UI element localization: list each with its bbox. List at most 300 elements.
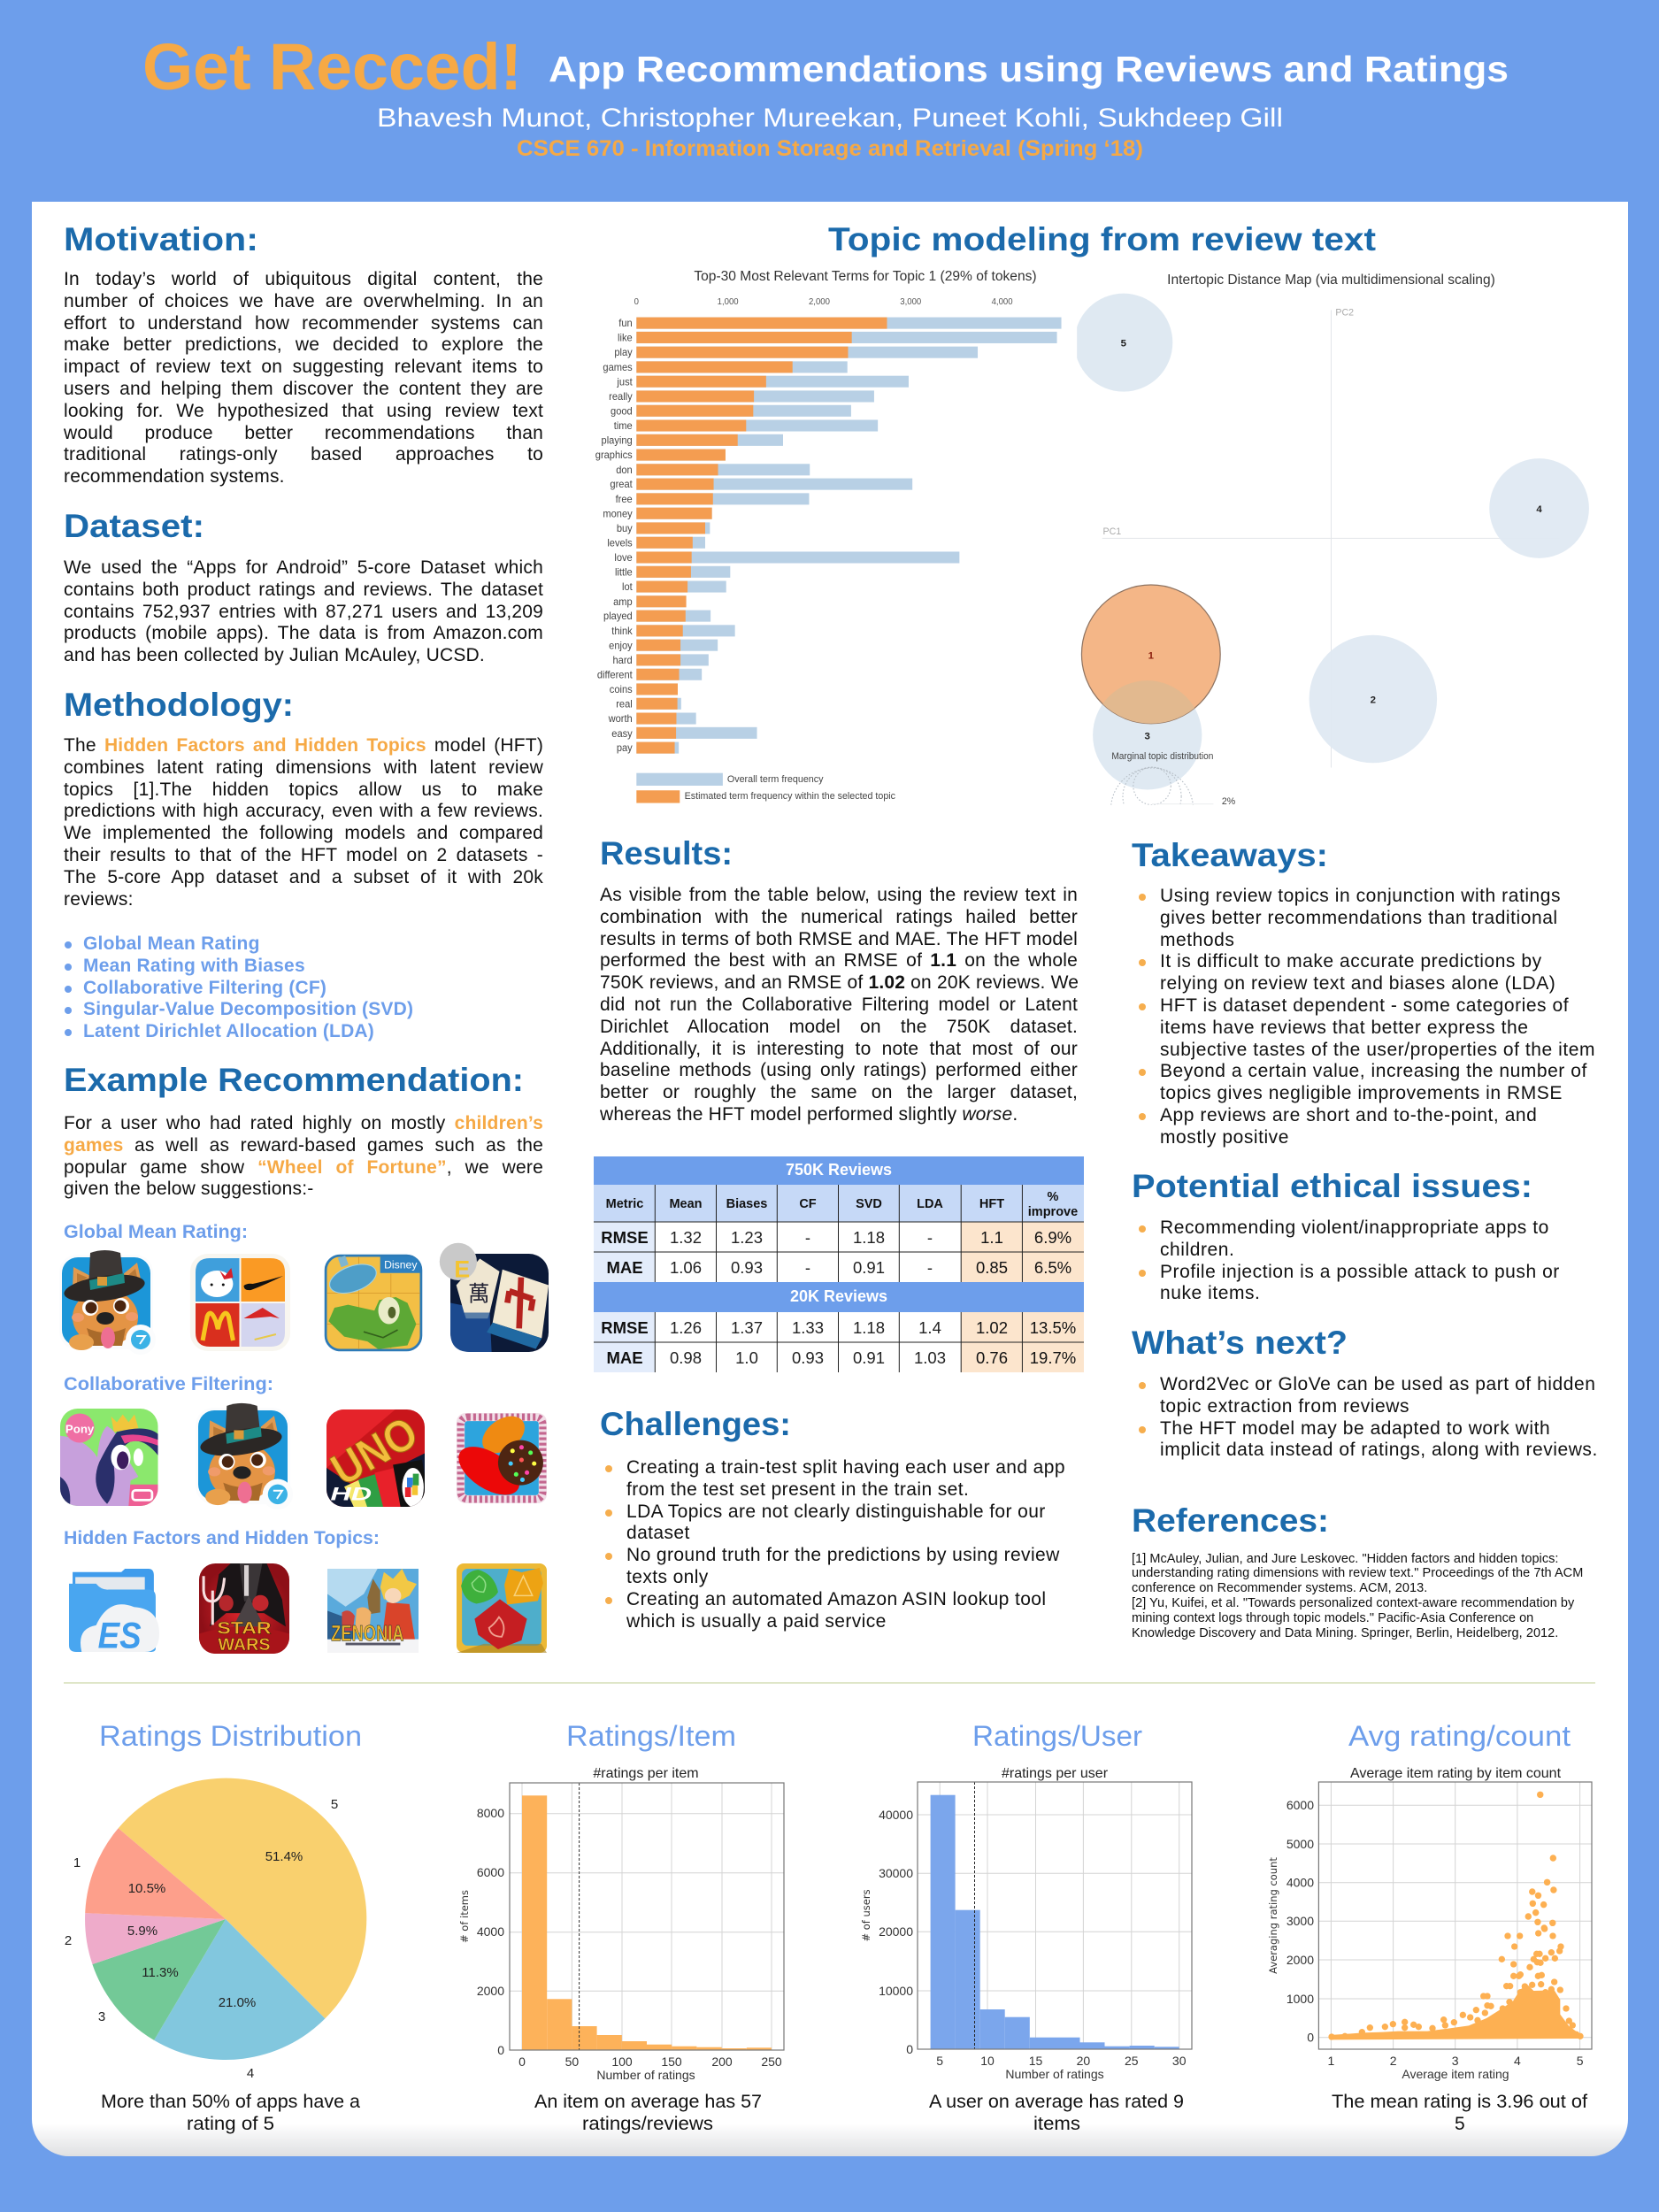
text: results: performed the best with an RMSE of 1.1 on the whole xyxy=(600,950,1078,971)
table text: LDA xyxy=(917,1197,943,1211)
tick labels: 50 xyxy=(565,2055,579,2069)
term labels: easy xyxy=(611,729,633,740)
tick labels: 25 xyxy=(1125,2054,1139,2068)
heading: Motivation: Motivation: xyxy=(64,221,258,257)
pie labels: 4 xyxy=(247,2066,254,2081)
course line: CSCE 670 - Information Storage and Retrieval (Spring ‘18) xyxy=(517,136,1143,161)
term labels: different xyxy=(597,670,634,680)
text: results: better or roughly the same on the larger dataset, xyxy=(600,1082,1078,1102)
map title: Intertopic Distance Map (via multidimensional scaling) xyxy=(1167,273,1495,288)
results table xyxy=(594,1156,1084,1372)
tick labels xyxy=(1286,1798,1584,2068)
table text: 0.85 xyxy=(976,1258,1008,1277)
term labels: enjoy xyxy=(609,641,633,651)
tick labels: 0 xyxy=(497,2043,504,2057)
upper outlier points xyxy=(1525,1792,1557,1932)
caption: ratings per user: A user on average has rated 9 xyxy=(929,2092,1184,2112)
icon: puppy app xyxy=(59,1250,156,1355)
pie labels: 10.5% xyxy=(128,1881,165,1896)
histogram: ratings per item xyxy=(458,1766,784,2082)
list: ethical issues: nuke items. xyxy=(1160,1283,1260,1303)
icon: puppy app repeat xyxy=(196,1403,293,1509)
topic circle 5 xyxy=(1074,294,1172,392)
tick labels: 3000 xyxy=(1286,1914,1314,1928)
term labels: just xyxy=(616,377,633,388)
tick labels: 0 xyxy=(1307,2030,1314,2044)
heading: Ratings/User: Ratings/User xyxy=(972,1720,1142,1752)
table text: RMSE xyxy=(601,1228,649,1247)
term labels: worth xyxy=(608,714,633,725)
x axis label: Number of ratings xyxy=(1005,2067,1104,2081)
term labels: played xyxy=(603,611,633,622)
axis tick labels: 1,000 xyxy=(718,297,739,307)
tick labels: 30 xyxy=(1172,2054,1187,2068)
chart title: #ratings per user xyxy=(1002,1766,1109,1781)
text: dataset: products (mobile apps). The data is from Amazon.com xyxy=(64,623,543,643)
marginal topic distribution legend: Marginal topic distribution xyxy=(1111,751,1214,762)
term labels: games xyxy=(603,363,633,373)
term labels: love xyxy=(614,553,633,564)
text: references xyxy=(1132,1552,1583,1640)
text: motivation: In today’s world of ubiquitous digital content, the xyxy=(64,269,543,289)
slice 5 xyxy=(119,1778,366,2018)
icon: ES file explorer: ES xyxy=(98,1616,142,1656)
table text: 6.5% xyxy=(1034,1258,1071,1277)
text: dataset: contains both product ratings and reviews. The dataset xyxy=(64,580,543,600)
tick labels: 15 xyxy=(1029,2054,1042,2068)
text: dataset: contains 752,937 entries with 87,271 users and 13,209 xyxy=(64,602,543,622)
text: motivation: looking for. We hypothesized that using review text xyxy=(64,401,543,421)
table text: 1.26 xyxy=(670,1318,702,1337)
term labels: really xyxy=(609,392,633,403)
term labels: levels xyxy=(607,538,633,549)
list: takeaways: gives better recommendations than traditional xyxy=(1160,908,1558,928)
term labels: real xyxy=(616,699,633,710)
list: challenges: from the test set present in the train set. xyxy=(626,1479,969,1500)
icon: Angry Birds Star Wars: WARS xyxy=(218,1635,271,1655)
caption: ratings per item xyxy=(534,2092,762,2134)
table text: HFT xyxy=(979,1197,1004,1211)
axes xyxy=(1102,310,1559,768)
topic circle 5: 5 xyxy=(1121,339,1127,349)
pie labels: 11.3% xyxy=(142,1965,179,1980)
text: results: baseline methods (using only ratings) performed either xyxy=(600,1060,1078,1080)
axis tick labels: 3,000 xyxy=(900,297,922,307)
bar chart: top terms for topic 1 xyxy=(595,269,1062,803)
tick labels: 6000 xyxy=(477,1865,504,1879)
term labels: lot xyxy=(622,582,633,593)
text: methodology: topics [1].The hidden topics allow us to make xyxy=(64,780,543,800)
list: takeaways: topics gives negligible improvements in RMSE xyxy=(1160,1083,1563,1103)
list: takeaways: relying on review text and biases alone (LDA) xyxy=(1160,973,1555,994)
axis labels: PC1 xyxy=(1103,526,1121,537)
grid xyxy=(1318,1782,1592,2049)
table text: 1.23 xyxy=(731,1228,763,1247)
text: references: mining context logs through topic models." Pacific-Asia Conference on xyxy=(1132,1611,1533,1625)
topic frequency bars xyxy=(636,318,887,754)
axis tick labels: 4,000 xyxy=(992,297,1013,307)
list: baseline models: Singular-Value Decomposition (SVD) xyxy=(83,999,413,1019)
legend xyxy=(636,773,896,803)
table text: 1.32 xyxy=(670,1228,702,1247)
icon: My Little Pony: Pony xyxy=(65,1423,95,1435)
heading: Takeaways: Takeaways: xyxy=(1132,837,1328,873)
caption: mean rating: 5 xyxy=(1455,2114,1465,2134)
table text: 1.06 xyxy=(670,1258,702,1277)
list: challenges: which is usually a paid service xyxy=(626,1611,887,1632)
heading: Dataset: Dataset: xyxy=(64,508,204,544)
authors: Bhavesh Munot, Christopher Mureekan, Puneet Kohli, Sukhdeep Gill xyxy=(377,104,1283,133)
caption: mean rating: The mean rating is 3.96 out of xyxy=(1332,2092,1587,2112)
tick labels: 1 xyxy=(1328,2054,1335,2068)
text: references: [1] McAuley, Julian, and Jure Leskovec. "Hidden factors and hidden topics: xyxy=(1132,1552,1559,1566)
heading: Avg rating/count: Avg rating/count xyxy=(1348,1720,1571,1752)
x axis label: Number of ratings xyxy=(596,2068,695,2082)
icon: mahjong xyxy=(440,1243,549,1352)
table text: 1.02 xyxy=(976,1318,1008,1337)
text: references: Knowledge Discovery and Data Mining. Springer, Berlin, Heidelberg, 2012. xyxy=(1132,1626,1558,1640)
table text: Mean xyxy=(669,1197,703,1211)
list: takeaways: It is difficult to make accurate predictions by xyxy=(1160,951,1542,972)
topic circle 2: 2 xyxy=(1371,695,1376,705)
table text: 0.93 xyxy=(731,1258,763,1277)
tick labels: 5 xyxy=(1577,2054,1584,2068)
intertopic distance map xyxy=(1074,273,1589,850)
tick labels: 150 xyxy=(661,2055,682,2069)
tick labels: 10 xyxy=(980,2054,995,2068)
text: methodology: combines latent rating dimensions with latent review xyxy=(64,757,543,778)
table text: 1.1 xyxy=(980,1228,1003,1247)
scatter: average rating by count xyxy=(1267,1766,1592,2081)
text: results: 750K reviews, and an RMSE of 1.02 on 20K reviews. We xyxy=(600,972,1079,993)
table text: 1.37 xyxy=(731,1318,763,1337)
list: what's next xyxy=(1139,1374,1598,1460)
heading: Ratings/Item: Ratings/Item xyxy=(566,1720,736,1752)
term labels: like xyxy=(618,333,633,344)
label: Collaborative Filtering: Collaborative Filtering: xyxy=(64,1374,273,1394)
text: motivation xyxy=(64,269,543,487)
text: motivation: effort to understand how recommender systems can xyxy=(64,313,543,334)
heading: Ratings Distribution: Ratings Distribution xyxy=(99,1720,362,1752)
list: takeaways: subjective tastes of the user/properties of the item xyxy=(1160,1040,1595,1060)
heading: Challenges: Challenges: xyxy=(600,1406,791,1442)
text: results: Dirichlet Allocation model on the 750K dataset. xyxy=(600,1017,1078,1037)
table text: CF xyxy=(799,1197,817,1211)
list: takeaways xyxy=(1139,886,1595,1148)
list: baseline models: Mean Rating with Biases xyxy=(83,956,305,976)
term labels: little xyxy=(615,567,633,579)
icon: Zenonia: ZENONIA xyxy=(331,1623,404,1646)
table text: 0.93 xyxy=(792,1348,824,1367)
legend: Overall term frequency xyxy=(727,774,824,785)
caption: ratings per item: An item on average has 57 xyxy=(534,2092,762,2112)
text: dataset: and has been collected by Julian McAuley, UCSD. xyxy=(64,645,485,665)
heading: Potential ethical issues: Potential ethical issues: xyxy=(1132,1168,1532,1204)
chart title: #ratings per item xyxy=(593,1766,699,1781)
y axis label: # of users xyxy=(860,1889,872,1942)
tick labels: 100 xyxy=(611,2055,633,2069)
pie labels: 5 xyxy=(331,1797,338,1812)
table text: RMSE xyxy=(601,1318,649,1337)
slice 2 xyxy=(85,1913,226,1964)
heading: Methodology: Methodology: xyxy=(64,687,294,723)
icon: UNO: HD xyxy=(330,1484,372,1504)
list: challenges: texts only xyxy=(626,1567,709,1587)
tick labels: 8000 xyxy=(477,1806,504,1820)
bars xyxy=(522,1795,772,2050)
text: results: results in terms of both RMSE and MAE. The HFT model xyxy=(600,929,1078,949)
table text: Biases xyxy=(726,1197,767,1211)
tick labels: 30000 xyxy=(879,1866,913,1880)
text: methodology: We implemented the following models and compared xyxy=(64,823,543,843)
text: references: [2] Yu, Kuifei, et al. "Towards personalized context-aware recommendation by xyxy=(1132,1596,1574,1610)
term labels: coins xyxy=(610,685,633,695)
list: baseline models xyxy=(65,933,413,1041)
text: example recommendation: For a user who had rated highly on mostly children’s xyxy=(64,1113,543,1133)
table text: 13.5% xyxy=(1030,1318,1076,1337)
list: what's next: Word2Vec or GloVe can be used as part of hidden xyxy=(1160,1374,1595,1394)
grid xyxy=(918,1782,1192,2049)
table text: 750K Reviews xyxy=(786,1161,892,1179)
tick labels: 6000 xyxy=(1286,1798,1314,1812)
icon: logo quiz xyxy=(190,1254,290,1351)
text: example recommendation: given the below suggestions:- xyxy=(64,1179,313,1199)
tick labels xyxy=(879,1808,1187,2068)
list: takeaways: App reviews are short and to-the-point, and xyxy=(1160,1105,1537,1125)
list: challenges: No ground truth for the predictions by using review xyxy=(626,1545,1060,1565)
bars xyxy=(931,1795,1179,2049)
table text: 1.03 xyxy=(914,1348,946,1367)
table text: - xyxy=(927,1258,933,1277)
list: takeaways: Using review topics in conjunction with ratings xyxy=(1160,886,1561,906)
term labels: graphics xyxy=(595,450,633,461)
term labels: buy xyxy=(617,524,633,534)
slice 3 xyxy=(92,1919,226,2040)
text: motivation: make better predictions, we decided to explore the xyxy=(64,334,543,355)
term labels: playing xyxy=(602,435,633,447)
dense point mass xyxy=(1328,1925,1584,2040)
text: motivation: recommendation systems. xyxy=(64,466,285,487)
text: motivation: users and helping them discover the content they are xyxy=(64,379,543,399)
y axis label: Averaging rating count xyxy=(1267,1857,1279,1974)
axis labels: PC2 xyxy=(1335,308,1354,319)
table text: 19.7% xyxy=(1030,1348,1076,1367)
table lines xyxy=(594,1185,1084,1372)
table text xyxy=(601,1161,1078,1367)
pie chart: ratings distribution xyxy=(65,1778,366,2081)
table text: - xyxy=(927,1228,933,1247)
term labels: money xyxy=(603,509,633,519)
text: methodology: The 5-core App dataset and a subset of it with 20k xyxy=(64,867,543,887)
text: results: combination with the numerical ratings hailed better xyxy=(600,907,1078,927)
term labels: don xyxy=(616,465,633,476)
caption: ratings per user xyxy=(929,2092,1184,2134)
chart title: Average item rating by item count xyxy=(1350,1766,1562,1781)
list: challenges xyxy=(605,1457,1065,1632)
tick labels: 1000 xyxy=(1286,1992,1314,2006)
text: motivation: impact of review text on suggesting relevant items to xyxy=(64,357,543,377)
caption: ratings per user: items xyxy=(1033,2114,1080,2134)
x axis label: Average item rating xyxy=(1402,2067,1509,2081)
tick labels: 4000 xyxy=(477,1924,504,1939)
text: methodology: reviews: xyxy=(64,889,134,910)
tick labels: 5000 xyxy=(1286,1837,1314,1851)
topic circle 3 xyxy=(1093,680,1202,789)
text: references: conference on Recommender systems. ACM, 2013. xyxy=(1132,1581,1427,1595)
list: takeaways: Beyond a certain value, increasing the number of xyxy=(1160,1061,1587,1081)
term labels: fun xyxy=(618,319,633,329)
term labels: good xyxy=(611,406,633,417)
icon: mahjong: E xyxy=(454,1256,470,1283)
tick labels: 20000 xyxy=(879,1924,913,1939)
topic circle 1 selected xyxy=(1081,585,1220,789)
list: baseline models: Collaborative Filtering (CF) xyxy=(83,978,326,998)
text: methodology: their results to that of the HFT model on 2 datasets - xyxy=(64,845,543,865)
heading: Topic modeling: Topic modeling from review text xyxy=(828,221,1376,257)
slice 1 xyxy=(85,1828,226,1919)
heading: Results: Results: xyxy=(600,835,733,872)
list: what's next: implicit data instead of ratings, along with reviews. xyxy=(1160,1440,1598,1460)
text: dataset: We used the “Apps for Android” 5-core Dataset which xyxy=(64,557,543,578)
table text: 1.4 xyxy=(918,1318,941,1337)
tick labels: 10000 xyxy=(879,1984,913,1998)
list: ethical issues xyxy=(1139,1217,1560,1303)
list: takeaways: HFT is dataset dependent - some categories of xyxy=(1160,995,1569,1016)
chart title: Top-30 Most Relevant Terms for Topic 1 (29% of tokens) xyxy=(694,269,1037,284)
term labels: hard xyxy=(613,656,633,666)
table text: 1.33 xyxy=(792,1318,824,1337)
text: results: did not run the Collaborative Filtering model or Latent xyxy=(600,995,1078,1015)
text: results: Additionally, it is interesting to note that most of our xyxy=(600,1039,1078,1059)
topic circle 2 xyxy=(1310,635,1437,763)
text: dataset xyxy=(64,557,543,665)
table text: 20K Reviews xyxy=(790,1287,887,1305)
term labels: time xyxy=(614,421,633,432)
caption: mean rating xyxy=(1332,2092,1587,2134)
subtitle: App Recommendations using Reviews and Ratings xyxy=(549,49,1509,89)
icon: Angry Birds Star Wars: STAR xyxy=(217,1619,272,1639)
table text: Metric xyxy=(606,1197,643,1211)
list: challenges: Creating a train-test split having each user and app xyxy=(626,1457,1065,1478)
text: methodology: The Hidden Factors and Hidden Topics model (HFT) xyxy=(64,735,543,756)
text: results: As visible from the table below, using the review text in xyxy=(600,885,1078,905)
icon: gem game xyxy=(457,1563,547,1653)
heading: Example Recommendation: Example Recommendation: xyxy=(64,1062,524,1098)
icon: Zenonia xyxy=(327,1569,419,1653)
table text: % xyxy=(1048,1190,1059,1204)
pie labels: 5.9% xyxy=(127,1924,157,1939)
pie labels: 21.0% xyxy=(219,1995,256,2010)
pie labels xyxy=(65,1797,338,2081)
tick labels: 40000 xyxy=(879,1808,913,1822)
caption: pie: rating of 5 xyxy=(187,2114,274,2134)
marginal topic distribution legend: 2% xyxy=(1222,796,1236,807)
tick labels: 2 xyxy=(1390,2054,1397,2068)
table text: SVD xyxy=(856,1197,882,1211)
table fills xyxy=(594,1156,1084,1372)
heading: References: References: xyxy=(1132,1502,1329,1539)
caption: ratings per item: ratings/reviews xyxy=(582,2114,713,2134)
text: results xyxy=(600,885,1079,1125)
icon: mahjong: 萬 xyxy=(468,1282,489,1306)
tick labels: 200 xyxy=(711,2055,733,2069)
axis tick labels: 0 xyxy=(634,297,639,307)
tick labels: 5 xyxy=(936,2054,943,2068)
axis tick labels: 2,000 xyxy=(809,297,830,307)
topic circle 1 selected: 1 xyxy=(1148,650,1155,661)
tick labels: 0 xyxy=(518,2055,526,2069)
text: example recommendation xyxy=(64,1113,543,1199)
table text: - xyxy=(805,1228,810,1247)
tick labels: 0 xyxy=(906,2042,913,2056)
text: methodology: predictions with high accuracy, even with a few reviews. xyxy=(64,801,543,821)
term labels xyxy=(595,319,634,754)
table text: - xyxy=(805,1258,810,1277)
pie labels: 2 xyxy=(65,1933,72,1948)
list: challenges: dataset xyxy=(626,1523,690,1543)
icon: My Little Pony xyxy=(60,1409,157,1506)
table text: 0.76 xyxy=(976,1348,1008,1367)
topic circle 3: 3 xyxy=(1145,731,1150,741)
tick labels: 250 xyxy=(761,2055,782,2069)
text: example recommendation: popular game show “Wheel of Fortune”, we were xyxy=(64,1157,543,1178)
axis tick labels xyxy=(634,297,1013,307)
pie labels: 3 xyxy=(98,2009,105,2024)
table text: MAE xyxy=(606,1348,643,1367)
table text: 0.91 xyxy=(853,1258,885,1277)
list: challenges: Creating an automated Amazon ASIN lookup tool xyxy=(626,1589,1046,1609)
caption: pie xyxy=(101,2092,360,2134)
table text: 1.18 xyxy=(853,1318,885,1337)
tick labels xyxy=(477,1806,782,2069)
term labels: think xyxy=(611,626,633,637)
term labels: amp xyxy=(613,597,633,608)
pie labels: 1 xyxy=(73,1855,81,1870)
text: motivation: traditional ratings-only based approaches to xyxy=(64,444,543,465)
icon: Where's My Water: Disney xyxy=(384,1258,418,1271)
term labels: pay xyxy=(617,743,633,754)
tick labels: 20 xyxy=(1077,2054,1090,2068)
table text: 1.0 xyxy=(735,1348,758,1367)
axis labels xyxy=(1103,308,1354,537)
grid xyxy=(510,1783,784,2050)
heading: What's next: What’s next? xyxy=(1132,1325,1348,1361)
list: ethical issues: children. xyxy=(1160,1240,1234,1260)
y axis label: # of items xyxy=(458,1890,471,1943)
term labels: play xyxy=(614,348,633,358)
tick labels: 4 xyxy=(1514,2054,1521,2068)
table text: improve xyxy=(1028,1205,1078,1219)
tick labels: 4000 xyxy=(1286,1876,1314,1890)
icon: ES file explorer xyxy=(69,1569,159,1656)
list: what's next: topic extraction from reviews xyxy=(1160,1396,1409,1417)
text: references: understanding rating dimensions with review text." Proceedings of the 7th ACM xyxy=(1132,1566,1583,1580)
list: takeaways: items have reviews that better express the xyxy=(1160,1018,1528,1038)
label: Global Mean Rating: Global Mean Rating: xyxy=(64,1222,248,1242)
text: motivation: number of choices we have are overwhelming. In an xyxy=(64,291,543,311)
table text: 6.9% xyxy=(1034,1228,1071,1247)
caption: pie: More than 50% of apps have a xyxy=(101,2092,360,2112)
term labels: great xyxy=(610,480,633,490)
text: results: whereas the HFT model performed slightly worse. xyxy=(600,1104,1018,1125)
topic circle 4: 4 xyxy=(1536,504,1542,515)
table text: 1.18 xyxy=(853,1228,885,1247)
list: baseline models: Global Mean Rating xyxy=(83,933,260,954)
list: what's next: The HFT model may be adapted to work with xyxy=(1160,1418,1550,1439)
legend: Estimated term frequency within the selected topic xyxy=(685,791,896,802)
text: methodology xyxy=(64,735,543,910)
label: Hidden Factors and Hidden Topics: Hidden Factors and Hidden Topics: xyxy=(64,1528,380,1548)
